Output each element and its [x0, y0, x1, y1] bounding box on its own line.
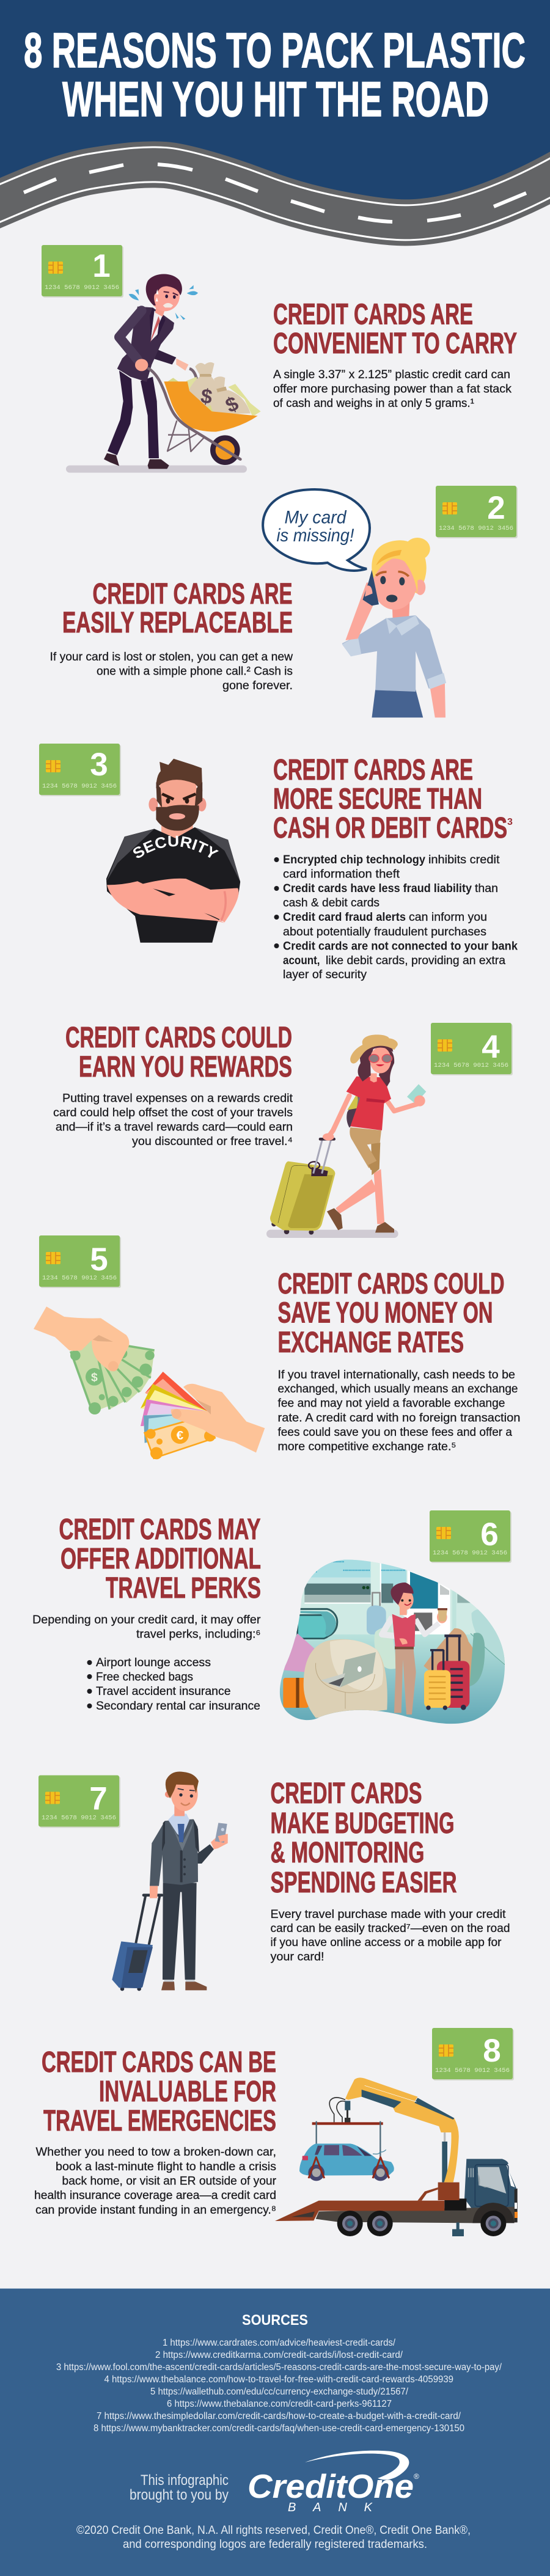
sources list: 1 https://www.cardrates.com/advice/heaviest-credit-cards/	[163, 2338, 396, 2348]
illustration: airport lounge scene	[280, 1559, 505, 1724]
bullet list: inhibits credit	[428, 853, 500, 866]
sources list	[56, 2338, 502, 2434]
heading: budgeting and monitoring	[270, 1777, 457, 1899]
credit card badge 7: 7	[89, 1780, 108, 1817]
copyright: ©2020 Credit One Bank, N.A. All rights reserved, Credit One®, Credit One Bank®,	[76, 2524, 471, 2537]
panel: reason 4 rewards	[53, 1022, 513, 1238]
bullet list: Credit card fraud alerts	[283, 910, 406, 924]
bullet list: Credit cards have less fraud liability	[283, 882, 472, 895]
credit card badge 8: 1234 5678 9012 3456	[435, 2068, 510, 2074]
bullet list: about potentially fraudulent purchases	[283, 925, 486, 939]
body text: of cash and weighs in at only 5 grams.¹	[273, 397, 474, 410]
body text: offer more purchasing power than a fat stack	[273, 382, 512, 396]
credit card badge 4: 1234 5678 9012 3456	[434, 1063, 508, 1069]
heading: easily replaceable: CREDIT CARDS ARE	[93, 578, 292, 610]
copyright	[76, 2524, 471, 2551]
panel: reason 1 convenient	[42, 245, 517, 473]
sources list: 7 https://www.thesimpledollar.com/credit-cards/how-to-create-a-budget-with-a-credit-card/	[97, 2411, 461, 2421]
heading: save on exchange rates	[277, 1268, 505, 1359]
body text: if you have online access or a mobile app for	[270, 1936, 502, 1949]
bullet list: cash & debit cards	[283, 896, 380, 909]
heading: earn rewards	[65, 1022, 292, 1083]
credit card badge 3: 1234 5678 9012 3456	[42, 783, 117, 790]
bullet list: acount,	[283, 954, 320, 967]
Credit One Bank logo: ®	[414, 2472, 419, 2481]
credit card badge 5	[39, 1235, 121, 1288]
body text: If you travel internationally, cash needs to be	[277, 1368, 515, 1381]
body text	[277, 1368, 521, 1453]
heading: travel emergencies	[42, 2046, 276, 2137]
perks list: Free checked bags	[96, 1670, 193, 1684]
sources list: 6 https://www.thebalance.com/credit-card-perks-961127	[167, 2399, 392, 2409]
body text	[273, 368, 512, 410]
body text	[53, 1091, 293, 1148]
body text	[32, 1613, 261, 1641]
panel: reason 8 emergencies	[34, 2028, 518, 2236]
body text: If your card is lost or stolen, you can get a new	[50, 650, 293, 664]
illustration: hands exchanging money: $	[91, 1372, 98, 1385]
body text	[34, 2145, 276, 2217]
credit card badge 7	[38, 1776, 120, 1828]
bullet list	[274, 853, 518, 981]
body text	[50, 650, 293, 692]
bullet list: layer of security	[283, 968, 367, 981]
heading: budgeting and monitoring: MAKE BUDGETING	[270, 1807, 455, 1840]
body text: Putting travel expenses on a rewards credit	[62, 1091, 293, 1105]
illustration: man pushing wheelbarrow of cash	[66, 274, 261, 473]
body text: fees could save you on these fees and offer a	[277, 1425, 512, 1439]
bullet list: can inform you	[409, 910, 487, 924]
illustration: businessman with phone and luggage	[112, 1771, 228, 1991]
Credit One Bank logo: CreditOne	[248, 2467, 414, 2505]
illustration: hands exchanging money: €	[177, 1429, 184, 1443]
heading: easily replaceable	[62, 578, 293, 639]
heading: travel emergencies: INVALUABLE FOR	[99, 2076, 276, 2108]
body text: gone forever.	[222, 679, 293, 692]
bullet list: like debit cards, providing an extra	[326, 954, 505, 967]
credit card badge 5: 5	[90, 1242, 108, 1278]
credit card badge 6: 6	[480, 1517, 499, 1553]
heading: additional perks: OFFER ADDITIONAL	[61, 1543, 261, 1575]
illustration: worried woman on phone	[342, 538, 446, 717]
heading: convenient to carry	[273, 298, 517, 360]
heading: budgeting and monitoring: & MONITORING	[270, 1837, 424, 1869]
winding road	[0, 164, 550, 222]
body text: card can be easily tracked⁷—even on the road	[270, 1922, 510, 1935]
speech bubble: is missing!	[276, 525, 354, 546]
illustration: man pushing wheelbarrow of cash: $	[222, 392, 242, 417]
body text	[270, 1908, 510, 1964]
credit card badge 6: 1234 5678 9012 3456	[433, 1550, 507, 1557]
heading: earn rewards: EARN YOU REWARDS	[79, 1051, 292, 1083]
credit card badge 2: 2	[487, 490, 505, 526]
heading: additional perks: TRAVEL PERKS	[106, 1572, 261, 1605]
perks list: Secondary rental car insurance	[96, 1699, 260, 1713]
title	[24, 23, 526, 127]
bullet list: than	[475, 882, 498, 895]
sources list: 2 https://www.creditkarma.com/credit-cards/i/lost-credit-card/	[155, 2350, 403, 2360]
panel: reason 5 exchange rates	[34, 1235, 521, 1459]
illustration: security guard: SECURITY	[133, 836, 219, 858]
credit card badge 1: 1	[92, 248, 111, 284]
body text: you discounted or free travel.⁴	[132, 1135, 293, 1148]
heading: more secure: 3	[507, 817, 513, 827]
credit card badge 6	[430, 1510, 512, 1563]
heading: additional perks	[59, 1513, 261, 1605]
body text: can provide instant funding in an emergency.⁸	[35, 2203, 276, 2217]
credit card badge 8	[432, 2028, 514, 2080]
body text: Depending on your credit card, it may offer	[32, 1613, 261, 1626]
heading: more secure	[273, 754, 513, 844]
credit card badge 2: 1234 5678 9012 3456	[439, 525, 513, 532]
illustration: hands exchanging money	[34, 1306, 265, 1459]
credit card badge 7: 1234 5678 9012 3456	[42, 1815, 116, 1822]
body text: your card!	[270, 1950, 324, 1964]
body text: exchanged, which usually means an exchange	[277, 1382, 518, 1396]
speech bubble	[263, 489, 370, 571]
panel: reason 7 budgeting	[38, 1771, 510, 1991]
credit card badge 5: 1234 5678 9012 3456	[42, 1275, 117, 1282]
illustration: man pushing wheelbarrow of cash: $	[199, 385, 214, 409]
body text: one with a simple phone call.² Cash is	[97, 665, 293, 678]
bullet list: Credit cards are not connected to your bank	[283, 940, 518, 953]
body text: rate. A credit card with no foreign transaction	[277, 1411, 521, 1425]
credit card badge 3	[39, 744, 121, 796]
sources heading: SOURCES	[242, 2312, 308, 2329]
body text: and—if it’s a travel rewards card—could earn	[56, 1121, 293, 1134]
heading: additional perks: CREDIT CARDS MAY	[59, 1513, 260, 1546]
header banner	[0, 0, 550, 222]
body text: travel perks, including:⁶	[136, 1628, 260, 1641]
sources list: 5 https://wallethub.com/edu/cc/currency-exchange-study/21567/	[150, 2387, 409, 2397]
sources list: 8 https://www.mybanktracker.com/credit-cards/faq/when-use-credit-card-emergency-130150	[94, 2423, 464, 2434]
perks list	[87, 1656, 260, 1713]
illustration: security guard	[106, 759, 241, 943]
brought to you by	[130, 2472, 229, 2503]
Credit One Bank logo	[248, 2451, 419, 2514]
footer panel	[0, 2288, 550, 2576]
credit card badge 4	[431, 1023, 513, 1075]
panel: reason 2 replaceable	[50, 486, 518, 717]
credit card badge 1: 1234 5678 9012 3456	[45, 285, 119, 291]
perks list: Airport lounge access	[96, 1656, 211, 1669]
body text: more competitive exchange rate.⁵	[277, 1440, 456, 1453]
illustration: traveler with suitcase	[266, 1034, 426, 1238]
sources list: 4 https://www.thebalance.com/how-to-travel-for-free-with-credit-card-rewards-4059939	[104, 2374, 453, 2385]
bullet list: card information theft	[283, 868, 400, 881]
body text: Whether you need to tow a broken-down car,	[35, 2145, 276, 2159]
heading: easily replaceable: EASILY REPLACEABLE	[62, 607, 293, 639]
heading: budgeting and monitoring: SPENDING EASIER	[270, 1867, 457, 1899]
body text: book a last-minute flight to handle a crisis	[56, 2160, 276, 2173]
body text: health insurance coverage area—a credit card	[34, 2189, 276, 2202]
Credit One Bank logo: BANK	[288, 2501, 373, 2514]
body text: Every travel purchase made with your credit	[270, 1908, 506, 1921]
heading: travel emergencies: TRAVEL EMERGENCIES	[43, 2105, 276, 2137]
panel: reason 3 secure	[39, 744, 518, 981]
sources list: 3 https://www.fool.com/the-ascent/credit-cards/articles/5-reasons-credit-cards-are-the-most-secure-way-to-pay/	[56, 2362, 502, 2373]
panel: reason 6 travel perks	[32, 1510, 512, 1729]
credit card badge 2	[436, 486, 518, 538]
speech bubble: My card	[285, 507, 347, 528]
heading: save on exchange rates: EXCHANGE RATES	[277, 1326, 464, 1359]
credit card badge 8: 8	[483, 2033, 501, 2069]
heading: travel emergencies: CREDIT CARDS CAN BE	[42, 2046, 276, 2079]
brought to you by: brought to you by	[130, 2487, 229, 2503]
body text: fee and may not yield a favorable exchange	[277, 1397, 505, 1410]
perks list: Travel accident insurance	[96, 1685, 231, 1698]
illustration: tow truck lifting car	[275, 2077, 518, 2236]
credit card badge 3: 3	[90, 747, 108, 783]
body text: card could help offset the cost of your travels	[53, 1106, 293, 1119]
body text: A single 3.37” x 2.125” plastic credit card can	[273, 368, 510, 381]
body text: back home, or visit an ER outside of your	[62, 2174, 276, 2187]
bullet list: Encrypted chip technology	[283, 853, 425, 866]
brought to you by: This infographic	[141, 2472, 229, 2489]
heading: budgeting and monitoring: CREDIT CARDS	[270, 1777, 422, 1810]
heading: earn rewards: CREDIT CARDS COULD	[65, 1022, 292, 1054]
credit card badge 1	[42, 245, 123, 298]
copyright: and corresponding logos are federally registered trademarks.	[123, 2538, 427, 2551]
credit card badge 4: 4	[482, 1029, 500, 1065]
